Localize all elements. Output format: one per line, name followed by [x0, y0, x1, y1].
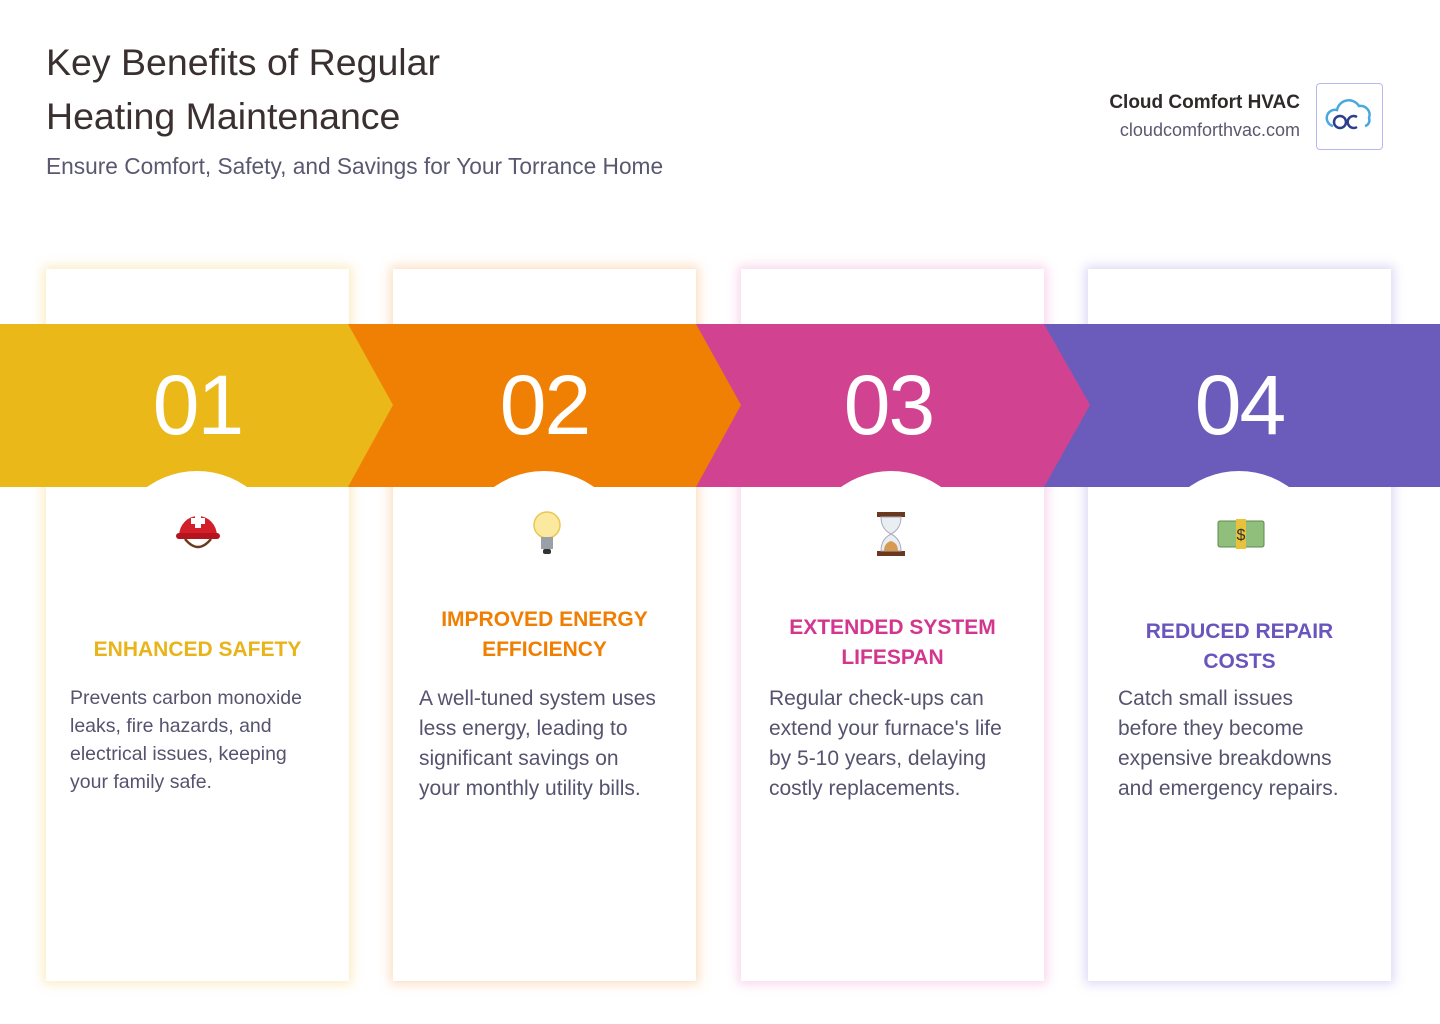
card 2 — [393, 269, 696, 981]
body 4: Catch small issues — [1118, 687, 1293, 710]
title — [46, 41, 440, 137]
brand block — [1109, 83, 1383, 150]
number 03: 03 — [844, 358, 933, 452]
body 2: significant savings on — [419, 747, 619, 770]
body 1: your family safe. — [70, 771, 212, 793]
card 4 — [1088, 269, 1391, 981]
body 2: your monthly utility bills. — [419, 777, 641, 800]
card 2 text — [419, 608, 656, 800]
body 1: electrical issues, keeping — [70, 743, 287, 765]
body 4: expensive breakdowns — [1118, 747, 1332, 770]
title 2: IMPROVED ENERGY — [441, 608, 648, 631]
body 4: and emergency repairs. — [1118, 777, 1339, 800]
icon: money: $ — [1237, 527, 1246, 544]
logo — [1316, 83, 1383, 150]
icon: hourglass — [877, 512, 905, 556]
icon: money — [1218, 519, 1264, 549]
body 4: before they become — [1118, 717, 1304, 740]
body 1: Prevents carbon monoxide — [70, 687, 302, 709]
number 04: 04 — [1195, 358, 1284, 452]
icon: helmet — [176, 516, 220, 548]
body 3: by 5-10 years, delaying — [769, 747, 986, 770]
icon: light bulb — [533, 511, 561, 554]
body 3: Regular check-ups can — [769, 687, 984, 710]
title 3: EXTENDED SYSTEM — [789, 616, 996, 639]
brand name: Cloud Comfort HVAC — [1109, 92, 1300, 113]
body 4 — [1118, 687, 1339, 800]
body 3: costly replacements. — [769, 777, 960, 800]
title 4: COSTS — [1203, 650, 1276, 673]
title 1: ENHANCED SAFETY — [94, 638, 301, 661]
title 3 — [789, 616, 996, 669]
body 3 — [769, 687, 1002, 800]
title: Key Benefits of Regular — [46, 41, 440, 83]
title 3: LIFESPAN — [841, 646, 944, 669]
body 2: A well-tuned system uses — [419, 687, 656, 710]
title 4: REDUCED REPAIR — [1146, 620, 1333, 643]
card 3 text — [769, 616, 1002, 800]
body 2 — [419, 687, 656, 800]
title: Heating Maintenance — [46, 95, 400, 137]
number 01: 01 — [153, 358, 242, 452]
brand url: cloudcomforthvac.com — [1120, 120, 1300, 140]
title 2: EFFICIENCY — [482, 638, 607, 661]
number 02: 02 — [500, 358, 589, 452]
card 1 — [46, 269, 349, 981]
body 3: extend your furnace's life — [769, 717, 1002, 740]
title 2 — [441, 608, 648, 661]
body 2: less energy, leading to — [419, 717, 628, 740]
body 1: leaks, fire hazards, and — [70, 715, 272, 737]
arrow band — [0, 324, 1440, 487]
title 4 — [1146, 620, 1333, 673]
card 4 text — [1118, 620, 1339, 800]
body 1 — [70, 687, 302, 793]
card 1 text — [70, 638, 302, 793]
subtitle: Ensure Comfort, Safety, and Savings for Your Torrance Home — [46, 153, 663, 179]
card 3 — [741, 269, 1044, 981]
